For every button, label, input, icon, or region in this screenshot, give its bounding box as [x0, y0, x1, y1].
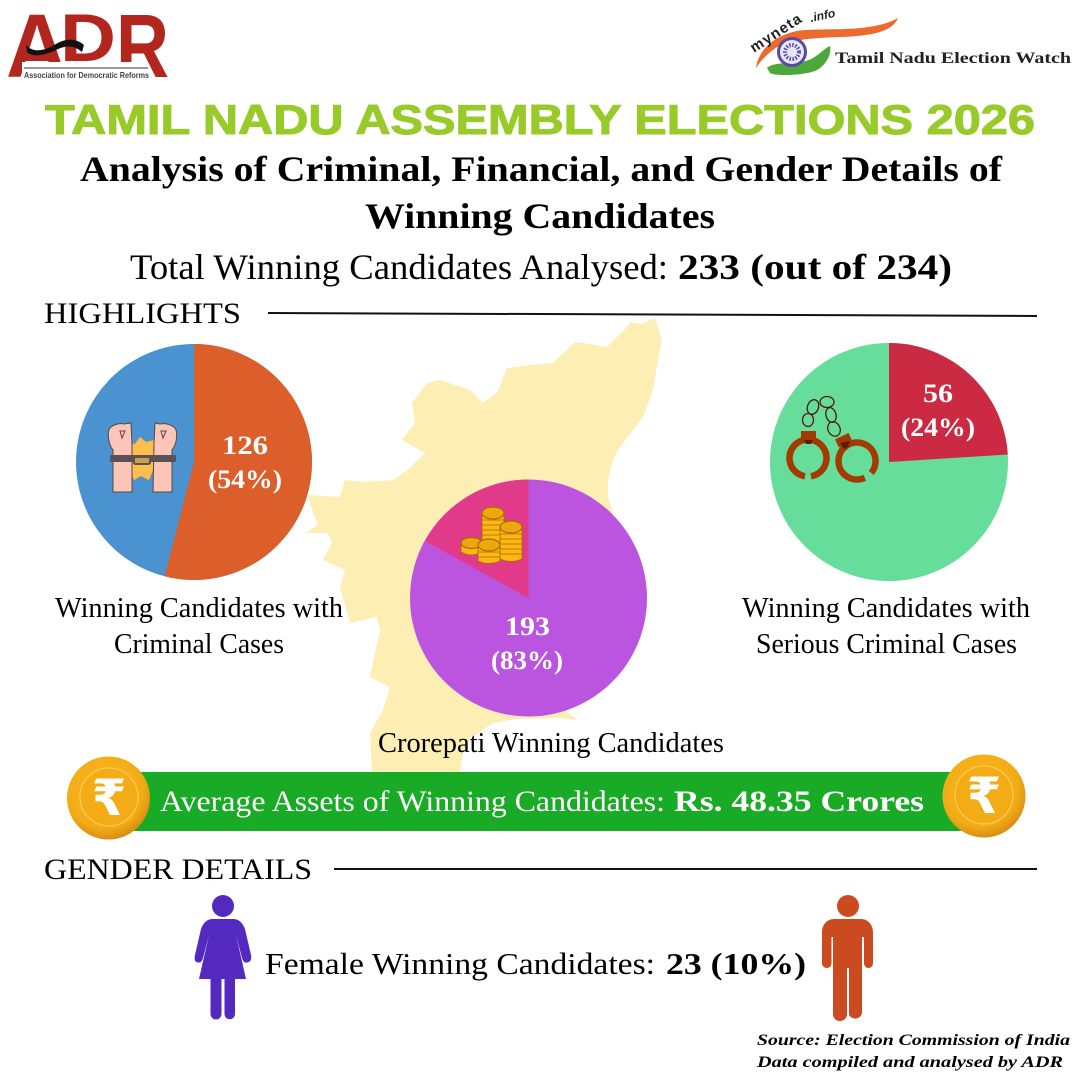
heading: highlights: HIGHLIGHTS: [44, 297, 241, 330]
value: 193 (83%): 193: [505, 612, 550, 641]
value: 56 (24%): (24%): [901, 413, 975, 442]
caption: criminal cases: Criminal Cases: [114, 629, 284, 660]
pie chart: serious criminal cases: [770, 343, 1008, 581]
gender text: Female Winning Candidates:: [265, 946, 655, 981]
value: 193 (83%): [491, 612, 563, 675]
caption: serious criminal cases: Winning Candidates with: [742, 593, 1030, 624]
title: TAMIL NADU ASSEMBLY ELECTIONS 2026: [45, 96, 1035, 143]
source note: Data compiled and analysed by ADR: [756, 1054, 1063, 1071]
icon: handcuffs: [790, 396, 876, 480]
value: 126 (54%): [208, 431, 282, 494]
gender text: [265, 946, 806, 981]
caption: criminal cases: [55, 593, 343, 660]
logo: ADR: Association for Democratic Reforms: [24, 70, 149, 80]
heading: gender details: GENDER DETAILS: [44, 853, 312, 886]
value: 193 (83%): (83%): [491, 646, 563, 675]
caption: criminal cases: Winning Candidates with: [55, 593, 343, 624]
logo: myneta Tamil Nadu Election Watch: myneta: [747, 10, 805, 56]
total analysed line: [130, 247, 952, 287]
icon: rupee coin left: [67, 756, 150, 840]
caption: serious criminal cases: Serious Criminal Cases: [756, 629, 1017, 660]
pie chart: crorepati: [410, 480, 647, 716]
gender text: 23 (10%): [666, 946, 806, 981]
icon: rupee coin right: ₹: [967, 767, 1001, 825]
logo: myneta Tamil Nadu Election Watch: .info: [809, 6, 836, 25]
icon: female figure: [195, 895, 251, 1020]
icon: coin stacks: [461, 507, 522, 564]
source note: Source: Election Commission of India: [757, 1032, 1070, 1049]
pie chart: criminal cases: [76, 344, 312, 580]
logo: myneta Tamil Nadu Election Watch: Tamil Nadu Election Watch: [835, 50, 1071, 67]
caption: serious criminal cases: [742, 593, 1030, 660]
total analysed line: 233 (out of 234): [678, 247, 952, 287]
icon: cuffed hands: [108, 423, 177, 492]
subtitle: Winning Candidates: [365, 196, 715, 236]
icon: rupee coin left: ₹: [92, 769, 126, 827]
logo: myneta Tamil Nadu Election Watch: [747, 6, 1071, 75]
value: 56 (24%): [901, 379, 975, 442]
value: 56 (24%): 56: [923, 379, 953, 408]
logo: ADR: D: [60, 0, 116, 76]
icon: rupee coin right: [942, 754, 1026, 838]
source note: [756, 1032, 1070, 1071]
logo: ADR: [6, 0, 169, 97]
banner: average assets: Average Assets of Winning Candidates:: [160, 785, 665, 818]
banner: average assets: Rs. 48.35 Crores: [674, 785, 924, 818]
caption: crorepati: Crorepati Winning Candidates: [378, 728, 724, 759]
value: 126 (54%): (54%): [208, 465, 282, 494]
banner: average assets: [133, 772, 961, 831]
total analysed line: Total Winning Candidates Analysed:: [130, 247, 668, 287]
icon: male figure: [822, 895, 873, 1021]
subtitle: [80, 149, 1003, 236]
value: 126 (54%): 126: [222, 431, 268, 460]
map: Tamil Nadu: [305, 318, 662, 772]
subtitle: Analysis of Criminal, Financial, and Gender Details of: [80, 149, 1003, 189]
